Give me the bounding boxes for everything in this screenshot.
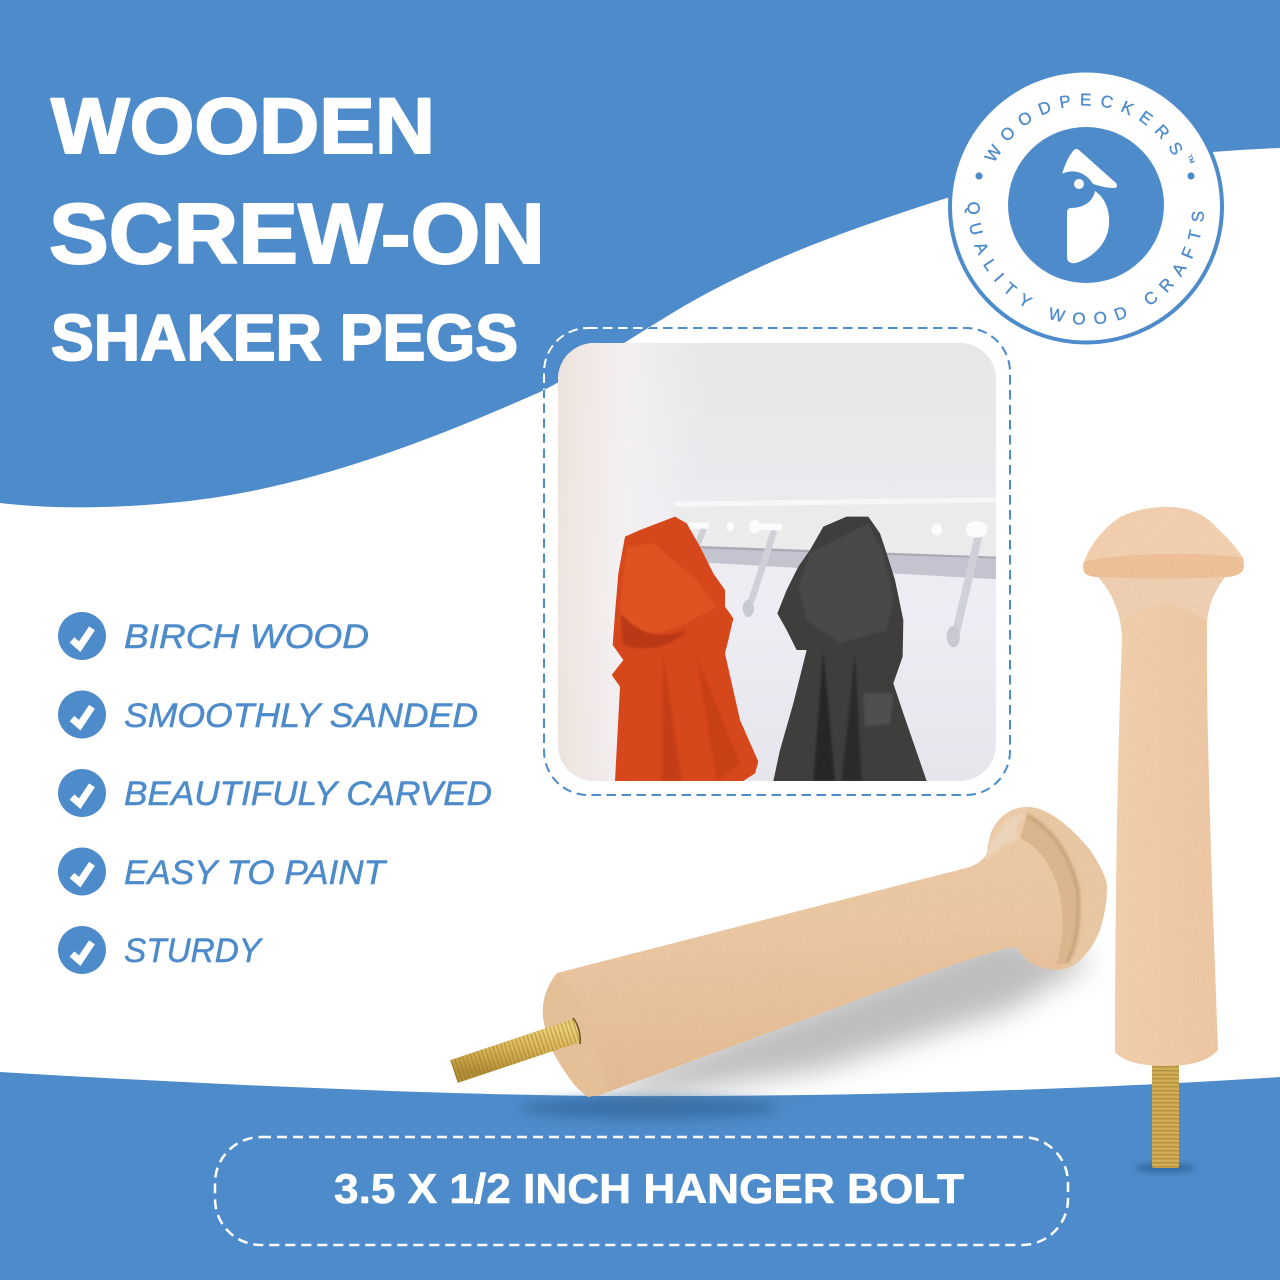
photo: coats hanging on white shaker peg rail [558, 343, 997, 781]
peg shadow bulbs [743, 600, 960, 647]
feature: beautifuly carved: BEAUTIFULY CARVED [124, 775, 492, 813]
lighter neck [1098, 577, 1225, 622]
bottom blue band [0, 1072, 1280, 1280]
white peg rail [673, 502, 997, 558]
logo separator dots [975, 172, 1195, 180]
shadow below the rail [700, 547, 997, 579]
peg cast shadows [697, 530, 978, 630]
top blue wave background [0, 0, 1280, 507]
feature: easy to paint [58, 848, 387, 896]
feature: sturdy [58, 926, 263, 974]
icon: woodpecker bird [1062, 149, 1117, 263]
vertical wooden peg [1083, 507, 1244, 1168]
logo ring text [964, 93, 1204, 325]
brass thread, horizontal peg [454, 1018, 580, 1072]
feature: birch wood [58, 612, 369, 660]
dome of head [1084, 507, 1243, 562]
logo ring text: QUALITY WOOD CRAFTS [964, 202, 1204, 325]
feature: easy to paint: EASY TO PAINT [124, 854, 387, 892]
logo ring text: TM [1186, 154, 1195, 165]
title: SHAKER PEGS [51, 301, 518, 374]
dashed frame around photo [544, 328, 1010, 795]
floor shadow of horizontal peg [520, 930, 1095, 1119]
size pill [215, 1137, 1068, 1245]
horizontal wooden peg [454, 807, 1107, 1097]
peg body, horizontal [543, 807, 1107, 1097]
darker head rim [1083, 554, 1244, 578]
size pill: 3.5 X 1/2 INCH HANGER BOLT [334, 1165, 964, 1212]
feature: smoothly sanded: SMOOTHLY SANDED [124, 697, 478, 735]
orange-red coat [612, 517, 758, 781]
title: WOODEN [51, 81, 435, 170]
white pegs [688, 520, 988, 538]
charcoal coat [773, 517, 927, 781]
vertical peg shadow on blue [1135, 1163, 1195, 1173]
logo badge [948, 72, 1224, 344]
title: SCREW-ON [49, 187, 545, 282]
feature: smoothly sanded [58, 690, 478, 738]
end face of peg [543, 973, 607, 1097]
peg head shading [986, 807, 1107, 970]
peg body, vertical [1083, 507, 1244, 1066]
logo ring text: WOODPECKERS [984, 93, 1182, 161]
feature: birch wood: BIRCH WOOD [124, 618, 369, 656]
feature: sturdy: STURDY [124, 932, 263, 970]
logo inner circle [1008, 127, 1164, 283]
brass thread, vertical peg [1152, 1062, 1179, 1168]
feature list [58, 612, 492, 974]
title [49, 81, 545, 374]
feature: beautifuly carved [58, 769, 492, 817]
